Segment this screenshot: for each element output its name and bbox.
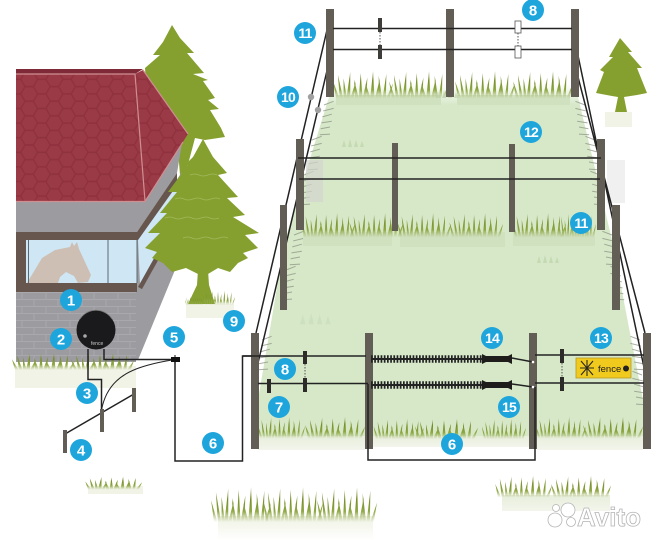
marker 8 front xyxy=(274,358,296,380)
front fence posts xyxy=(251,333,651,449)
side window frame xyxy=(140,238,168,288)
energizer xyxy=(76,310,116,350)
roof fascia xyxy=(16,143,182,232)
marker 13 xyxy=(590,327,612,349)
connector xyxy=(171,355,180,364)
front fence wires xyxy=(243,355,644,384)
side wall xyxy=(136,172,182,360)
marker 3 xyxy=(76,382,98,404)
front fence grass xyxy=(258,417,643,450)
marker 6 left: 6 xyxy=(209,436,217,452)
house xyxy=(16,69,188,362)
marker 6 left xyxy=(202,432,224,454)
marker 8 back: 8 xyxy=(529,2,537,20)
marker 12: 12 xyxy=(524,124,539,140)
side window xyxy=(138,184,178,284)
marker 1: 1 xyxy=(67,292,75,310)
gate springs xyxy=(371,359,482,385)
gate handles xyxy=(482,354,534,390)
marker 12 xyxy=(520,121,542,143)
ground rods xyxy=(63,388,136,453)
marker 11 top xyxy=(294,22,316,44)
large foreground grass xyxy=(211,487,377,540)
marker 7: 7 xyxy=(275,400,283,416)
marker 8 back xyxy=(522,0,544,21)
marker 3: 3 xyxy=(83,386,91,402)
front window xyxy=(26,240,137,283)
marker 5 xyxy=(163,326,185,348)
marker 8 front: 8 xyxy=(281,362,289,378)
energizer wiring xyxy=(65,349,535,461)
tree grass xyxy=(185,290,235,318)
marker 11 right: 11 xyxy=(574,215,589,231)
warning sign xyxy=(576,358,631,378)
back fence grass xyxy=(333,71,573,105)
marker 13: 13 xyxy=(594,330,609,346)
watermark: Avito xyxy=(577,502,641,532)
roof highlights xyxy=(16,70,188,202)
horse xyxy=(27,242,91,283)
middle fence xyxy=(296,139,605,232)
marker 10: 10 xyxy=(281,89,296,105)
marker 6 gate: 6 xyxy=(448,436,456,454)
marker 6 gate xyxy=(441,433,463,455)
marker 2 xyxy=(50,328,72,350)
house grass xyxy=(12,353,136,388)
marker 11 right xyxy=(570,212,592,234)
small grass tuft xyxy=(85,476,143,494)
small tree xyxy=(596,38,647,127)
marker 15 xyxy=(498,396,520,418)
marker 15: 15 xyxy=(502,399,517,415)
marker 4 xyxy=(70,439,92,461)
number markers xyxy=(50,0,612,461)
wire insulators on guy wires xyxy=(308,94,321,113)
back fence xyxy=(326,9,579,97)
marker 10 xyxy=(277,86,299,108)
back tree xyxy=(145,25,225,175)
roof side face xyxy=(135,70,188,201)
right foreground grass xyxy=(495,476,611,511)
window mullions xyxy=(28,240,137,283)
marker 9: 9 xyxy=(230,314,238,330)
roof main face xyxy=(16,74,145,201)
field xyxy=(258,84,643,437)
roof top edge xyxy=(16,69,143,74)
faint shadows beside middle posts xyxy=(306,160,625,203)
marker 7 xyxy=(268,396,290,418)
marker 4: 4 xyxy=(77,442,86,460)
faint field tufts xyxy=(300,90,559,324)
marker 9 xyxy=(223,310,245,332)
side posts xyxy=(280,205,620,310)
marker 5: 5 xyxy=(170,330,178,346)
field side grass xyxy=(258,100,646,406)
marker 14: 14 xyxy=(485,330,500,346)
warning sign: fence xyxy=(598,364,621,375)
marker 14 xyxy=(481,327,503,349)
middle fence grass xyxy=(301,213,596,247)
fence insulators xyxy=(267,349,564,393)
window frame xyxy=(16,173,177,292)
marker 11 top: 11 xyxy=(298,25,313,41)
marker 1 xyxy=(60,289,82,311)
watermark xyxy=(548,502,641,532)
brick wall xyxy=(16,292,136,362)
energizer: fence xyxy=(91,341,103,347)
marker 2: 2 xyxy=(57,332,65,348)
front tree xyxy=(145,139,259,304)
side guy wires xyxy=(256,30,645,372)
